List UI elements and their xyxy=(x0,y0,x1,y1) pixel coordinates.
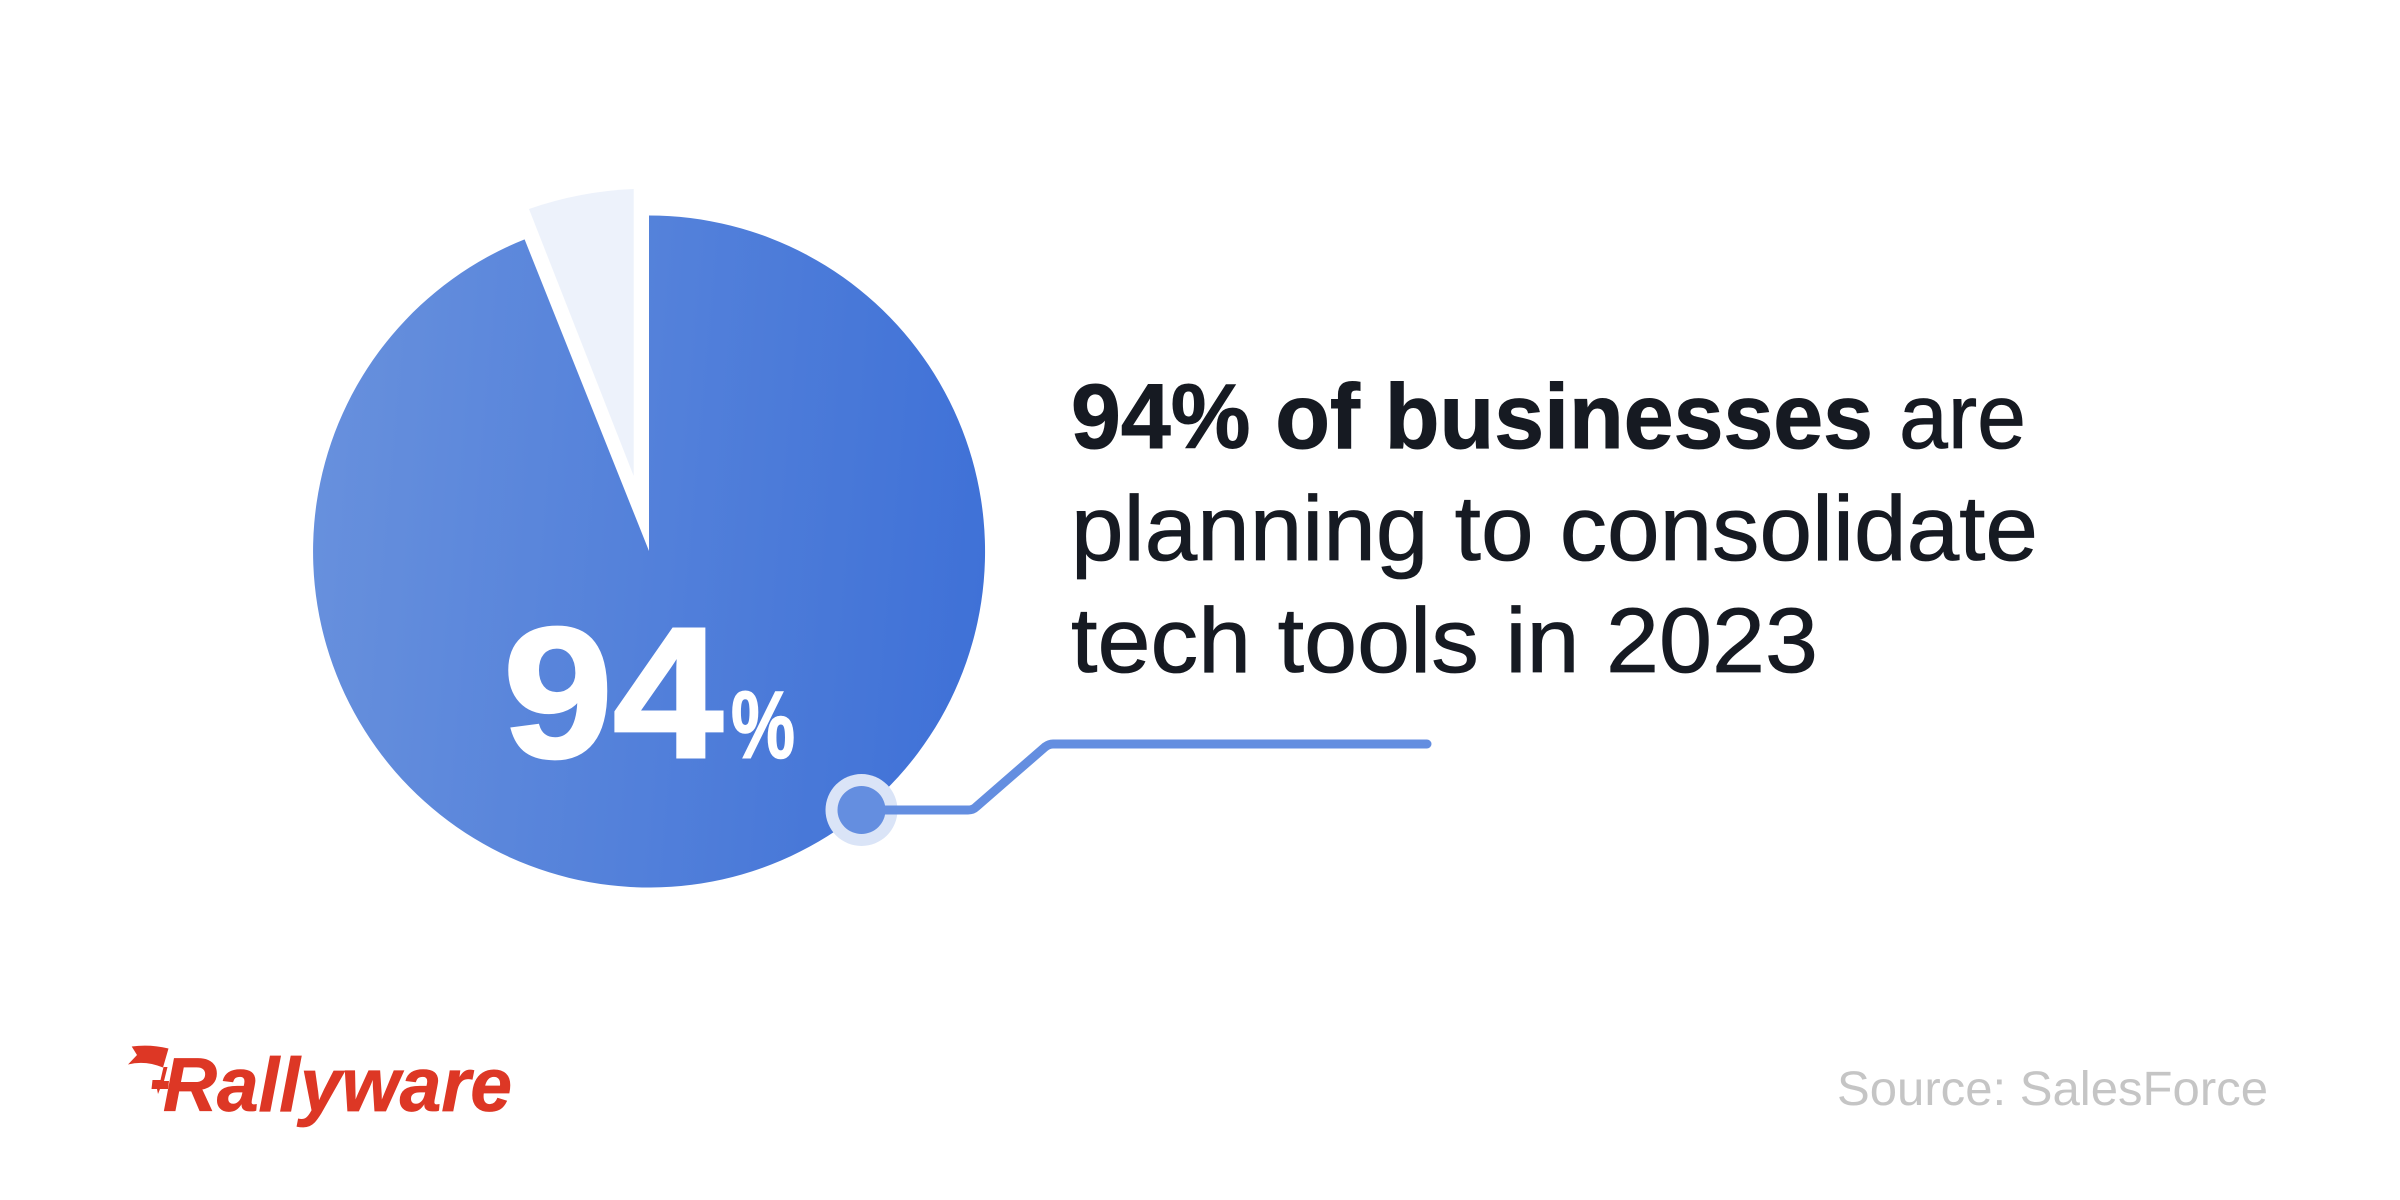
logo flag xyxy=(128,1046,169,1094)
headline line 3: tech tools in 2023 xyxy=(1071,590,1818,692)
headline text xyxy=(1071,366,2038,692)
headline line 2: planning to consolidate xyxy=(1071,478,2038,580)
connector marker ring xyxy=(826,774,898,846)
connector line xyxy=(861,744,1427,810)
pie chart xyxy=(313,189,985,887)
source note: Source: SalesForce xyxy=(1837,1063,2268,1116)
connector marker dot xyxy=(838,786,886,834)
pie value label xyxy=(503,590,795,797)
headline bold lead: 94% of businesses xyxy=(1071,366,1873,468)
pie segment: remaining 6 percent xyxy=(529,189,634,476)
Rallyware logo xyxy=(128,1043,512,1128)
percent sign: % xyxy=(731,672,795,779)
logo wordmark: Rallyware xyxy=(163,1043,512,1128)
callout connector xyxy=(826,744,1427,846)
pie segment: 94 percent xyxy=(313,216,985,887)
value: 94: 94 xyxy=(503,590,723,797)
headline line 1 end: are xyxy=(1899,366,2026,468)
